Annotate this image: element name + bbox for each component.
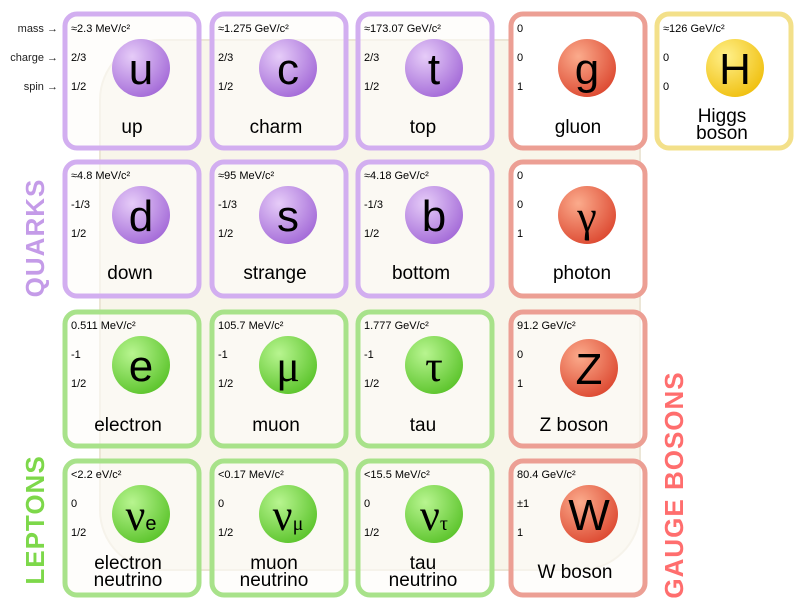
card: W boson: 80.4 GeV/c² (517, 469, 576, 481)
card: strange: strange (243, 263, 307, 284)
card: muon neutrino: 0 (218, 498, 224, 510)
card: muon neutrino: 1/2 (218, 527, 233, 539)
card: gluon: g (575, 45, 599, 94)
card: muon: μ (276, 342, 300, 391)
card: gluon: gluon (555, 117, 601, 138)
card: strange: 1/2 (218, 228, 233, 240)
card: Z boson: Z (576, 345, 602, 394)
card: strange: -1/3 (218, 199, 237, 211)
card: strange: ≈95 MeV/c² (218, 170, 275, 182)
card: tau: tau (410, 415, 436, 436)
card: down: -1/3 (71, 199, 90, 211)
card: Z boson: 91.2 GeV/c² (517, 320, 576, 332)
card: charm: ≈1.275 GeV/c² (218, 23, 289, 35)
card: strange (212, 162, 346, 296)
card: up (65, 14, 199, 148)
card: Higgs: 0 (663, 81, 669, 93)
card: charm: 2/3 (218, 52, 233, 64)
card: electron neutrino: 1/2 (71, 527, 86, 539)
card: muon neutrino: νμ (273, 491, 303, 540)
card: W boson: W (568, 491, 610, 540)
axis labels (10, 23, 58, 93)
card: photon: 0 (517, 170, 523, 182)
card: bottom: b (422, 192, 446, 241)
card: electron neutrino: νe (125, 491, 157, 540)
card: W boson (511, 461, 645, 595)
card: electron neutrino: <2.2 eV/c² (71, 469, 122, 481)
card: photon: photon (553, 263, 611, 284)
card: down (65, 162, 199, 296)
card: photon: 0 (517, 199, 523, 211)
card: tau: 1.777 GeV/c² (364, 320, 429, 332)
card: electron: 0.511 MeV/c² (71, 320, 136, 332)
card: strange: s (277, 192, 299, 241)
label: GAUGE BOSONS: GAUGE BOSONS (659, 371, 689, 599)
card: Higgs: 0 (663, 52, 669, 64)
card: Higgs (657, 14, 791, 148)
card: Higgs: boson (696, 123, 748, 144)
card: charm: c (277, 45, 299, 94)
card: Z boson: 0 (517, 349, 523, 361)
card: Higgs: Higgs (698, 106, 746, 127)
card: muon: 105.7 MeV/c² (218, 320, 284, 332)
card: top: t (428, 45, 440, 94)
card: up: 1/2 (71, 81, 86, 93)
card: electron: electron (94, 415, 162, 436)
card: gluon (511, 14, 645, 148)
card: Z boson (511, 312, 645, 446)
card: electron neutrino (65, 461, 199, 595)
card: electron neutrino: 0 (71, 498, 77, 510)
card: Higgs: ≈126 GeV/c² (663, 23, 725, 35)
card: gluon: 0 (517, 52, 523, 64)
card: tau (358, 312, 492, 446)
card: up: u (129, 45, 153, 94)
card: tau: 1/2 (364, 378, 379, 390)
card: up: ≈2.3 MeV/c² (71, 23, 131, 35)
card: electron: 1/2 (71, 378, 86, 390)
card: top: 2/3 (364, 52, 379, 64)
card: down: d (129, 192, 153, 241)
axis labels: mass → (18, 23, 58, 35)
card: Z boson: Z boson (540, 415, 608, 436)
axis labels: charge → (10, 52, 58, 64)
card: electron neutrino: neutrino (94, 570, 162, 591)
card: gluon: 1 (517, 81, 523, 93)
card: tau neutrino: 1/2 (364, 527, 379, 539)
card: bottom: -1/3 (364, 199, 383, 211)
card: charm (212, 14, 346, 148)
card: photon (511, 162, 645, 296)
card: bottom: bottom (392, 263, 450, 284)
card: charm: charm (250, 117, 302, 138)
card: tau: τ (425, 342, 443, 391)
card: tau: -1 (364, 349, 374, 361)
card: tau neutrino: <15.5 MeV/c² (364, 469, 430, 481)
card: tau neutrino: tau (410, 553, 436, 574)
card: photon: γ (576, 192, 597, 241)
card: muon: 1/2 (218, 378, 233, 390)
axis labels: spin → (24, 81, 58, 93)
card: muon (212, 312, 346, 446)
card: W boson: ±1 (517, 498, 529, 510)
card: muon: -1 (218, 349, 228, 361)
card: tau neutrino: ντ (420, 491, 448, 540)
card: Z boson: 1 (517, 378, 523, 390)
card: top (358, 14, 492, 148)
card: muon neutrino: neutrino (240, 570, 308, 591)
card: tau neutrino: neutrino (389, 570, 457, 591)
card: top: top (410, 117, 436, 138)
card: charm: 1/2 (218, 81, 233, 93)
card: tau neutrino (358, 461, 492, 595)
card: gluon: 0 (517, 23, 523, 35)
card: electron: e (129, 342, 153, 391)
card: bottom (358, 162, 492, 296)
card: muon neutrino: <0.17 MeV/c² (218, 469, 284, 481)
card: W boson: W boson (538, 562, 612, 583)
label: LEPTONS: LEPTONS (20, 455, 50, 585)
card: tau neutrino: 0 (364, 498, 370, 510)
card: muon neutrino: muon (250, 553, 298, 574)
card: electron neutrino: electron (94, 553, 162, 574)
card: up: 2/3 (71, 52, 86, 64)
card: muon: muon (252, 415, 300, 436)
card: photon: 1 (517, 228, 523, 240)
card: electron: -1 (71, 349, 81, 361)
label: QUARKS: QUARKS (20, 179, 50, 297)
card: down: ≈4.8 MeV/c² (71, 170, 131, 182)
card: electron (65, 312, 199, 446)
card: W boson: 1 (517, 527, 523, 539)
card: top: ≈173.07 GeV/c² (364, 23, 441, 35)
card: muon neutrino (212, 461, 346, 595)
card: bottom: ≈4.18 GeV/c² (364, 170, 429, 182)
card: top: 1/2 (364, 81, 379, 93)
card: bottom: 1/2 (364, 228, 379, 240)
card: up: up (121, 117, 143, 138)
card: down: 1/2 (71, 228, 86, 240)
card: down: down (107, 263, 153, 284)
card: Higgs: H (719, 45, 751, 94)
